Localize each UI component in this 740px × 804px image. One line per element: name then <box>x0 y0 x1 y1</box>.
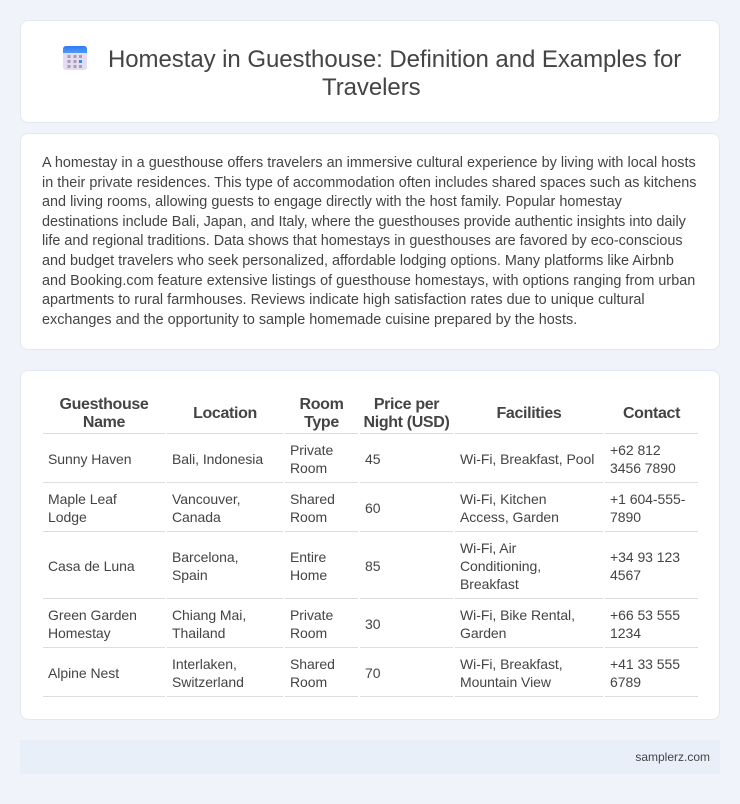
table: guesthouses: Shared <box>290 656 335 672</box>
table: guesthouses: Lodge <box>48 509 87 525</box>
text block: description: and Booking.com feature extensive listings of guesthouse homestays, with options ranging from urban <box>42 273 695 289</box>
table: guesthouses: +62 812 <box>610 442 661 458</box>
table: guesthouses: 1234 <box>610 625 641 641</box>
table: guesthouses: Wi-Fi, Kitchen <box>460 491 546 507</box>
icon: calendar <box>63 46 87 70</box>
table: guesthouses: 30 <box>365 616 380 632</box>
table: guesthouses: Wi-Fi, Bike Rental, <box>460 607 575 623</box>
table: guesthouses: Conditioning, <box>460 558 541 574</box>
panel: header <box>20 20 720 123</box>
table: guesthouses: Chiang Mai, <box>172 607 246 623</box>
text block: description: exchanges and the opportunity to sample homemade cuisine prepared by the hosts. <box>42 312 577 328</box>
table: guesthouses: +66 53 555 <box>610 607 680 623</box>
table: guesthouses: Guesthouse <box>60 396 148 412</box>
table: guesthouses: 70 <box>365 665 380 681</box>
text block: description: and budget travelers who seek personalized, affordable lodging options. Many platforms like Airbnb <box>42 253 674 269</box>
text block: description <box>42 155 696 328</box>
text block: description: A homestay in a guesthouse offers travelers an immersive cultural experience by living with local hosts <box>42 155 696 171</box>
footer: samplerz.com <box>635 750 710 764</box>
table: guesthouses: Night (USD) <box>364 414 449 430</box>
text block: description: life and regional traditions. Data shows that homestays in guesthouses are favored by eco-conscious <box>42 233 683 249</box>
table: guesthouses: Mountain View <box>460 674 551 690</box>
table: guesthouses: Casa de Luna <box>48 558 135 574</box>
text block: description: in their private residences. This type of accommodation often includes shared spaces such as kitchens <box>42 175 696 191</box>
table: guesthouses: Switzerland <box>172 674 244 690</box>
table: guesthouses: 7890 <box>610 509 641 525</box>
table: guesthouses: Barcelona, <box>172 549 238 565</box>
table: guesthouses: Canada <box>172 509 221 525</box>
table: guesthouses: Green Garden <box>48 607 137 623</box>
table: guesthouses: 3456 7890 <box>610 460 676 476</box>
panel: description <box>20 133 720 350</box>
table: guesthouses: Room <box>290 625 327 641</box>
table: guesthouses: Location <box>193 404 257 422</box>
table: guesthouses: Garden <box>460 625 506 641</box>
table: guesthouses <box>43 396 698 697</box>
table: guesthouses: Room <box>290 674 327 690</box>
text block: description: destinations include Bali, Japan, and Italy, where the guesthouses provide authentic insights into daily <box>42 214 686 230</box>
table: guesthouses: Type <box>304 414 339 430</box>
table: guesthouses: Vancouver, <box>172 491 241 507</box>
table: guesthouses: Bali, Indonesia <box>172 451 263 467</box>
table: guesthouses: Private <box>290 607 333 623</box>
table: guesthouses: Wi-Fi, Breakfast, Pool <box>460 451 594 467</box>
title: Homestay in Guesthouse: Definition and Examples for <box>108 46 681 73</box>
table: guesthouses: Price per <box>374 396 439 412</box>
panel: guesthouse table <box>20 370 720 720</box>
table: guesthouses: +34 93 123 <box>610 549 680 565</box>
table: guesthouses: Spain <box>172 567 208 583</box>
table: guesthouses: Breakfast <box>460 576 519 592</box>
title <box>108 46 681 101</box>
table: guesthouses: Sunny Haven <box>48 451 132 467</box>
table: guesthouses: Home <box>290 567 327 583</box>
table: guesthouses: 45 <box>365 451 380 467</box>
table: guesthouses: Homestay <box>48 625 111 641</box>
table: guesthouses: Alpine Nest <box>48 665 119 681</box>
table: guesthouses: Entire <box>290 549 326 565</box>
table: guesthouses: 4567 <box>610 567 641 583</box>
table: guesthouses: 85 <box>365 558 380 574</box>
table: guesthouses: 6789 <box>610 674 641 690</box>
table: guesthouses: Maple Leaf <box>48 491 117 507</box>
table: guesthouses: 60 <box>365 500 380 516</box>
table: guesthouses: Shared <box>290 491 335 507</box>
table: guesthouses: Wi-Fi, Air <box>460 540 516 556</box>
title: Travelers <box>322 74 421 101</box>
table: guesthouses: Interlaken, <box>172 656 237 672</box>
text block: description: apartments to rural farmhouses. Reviews indicate high satisfaction rates due to unique cultural <box>42 292 645 308</box>
table: guesthouses: Facilities <box>496 404 561 422</box>
table: guesthouses: Room <box>290 509 327 525</box>
table: guesthouses: Name <box>83 414 125 430</box>
table: guesthouses: Thailand <box>172 625 225 641</box>
table: guesthouses: +1 604-555- <box>610 491 685 507</box>
table: guesthouses: Room <box>300 396 343 412</box>
footer <box>20 740 720 774</box>
text block: description: and living rooms, allowing guests to engage directly with the host family. Popular homestay <box>42 194 622 210</box>
table: guesthouses: +41 33 555 <box>610 656 680 672</box>
table: guesthouses: Private <box>290 442 333 458</box>
table: guesthouses: Wi-Fi, Breakfast, <box>460 656 563 672</box>
table: guesthouses: Room <box>290 460 327 476</box>
table: guesthouses: Access, Garden <box>460 509 559 525</box>
table: guesthouses: Contact <box>623 404 680 422</box>
